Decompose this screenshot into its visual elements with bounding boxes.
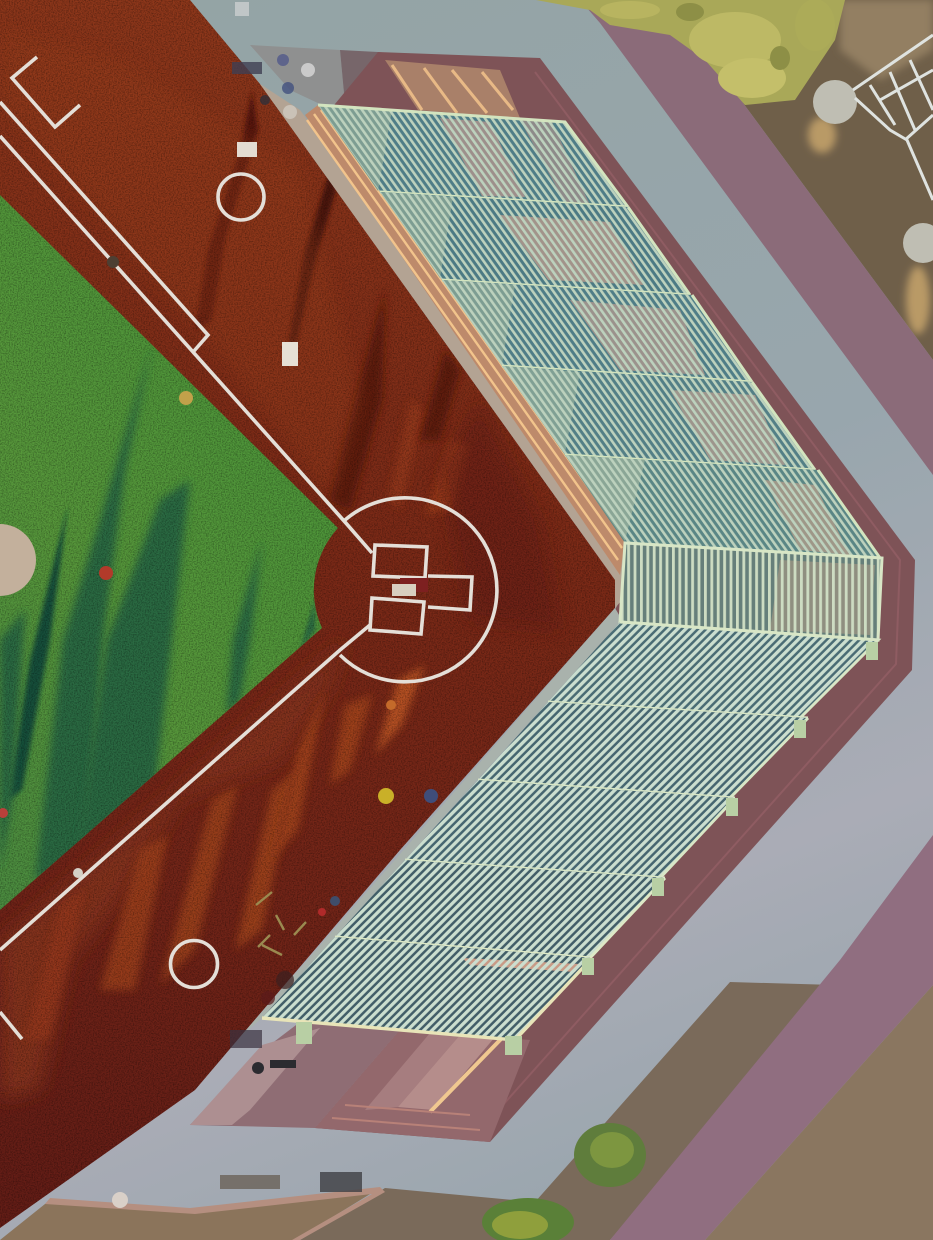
pergola panel 7 [478,702,808,798]
dirt: lower patch [300,982,835,1240]
people and gear [0,2,438,1208]
pergola panel 2 [380,192,690,295]
clay infield [0,0,615,1228]
orange stair band [305,105,627,575]
ramp lower left [190,1022,400,1128]
tower base circles [813,80,933,263]
top left marking [12,57,80,127]
on-deck circle: upper [218,174,264,220]
field grain texture [0,0,615,1228]
plaza slab top [340,50,418,110]
grass shadows [0,345,315,880]
pergola panel 5 [565,455,880,558]
bottom steps [315,1030,530,1142]
pink walkway: upper [580,0,933,475]
dirt: sunlit top corner [840,0,933,80]
third foul line [0,625,370,950]
dirt: bottom left strip [0,1188,380,1240]
top steps [385,60,520,118]
dirt: top right [670,0,933,360]
pergola panel 8 [405,780,735,878]
light tower [853,35,933,200]
clay light and shadow streaks [0,30,560,1100]
home plate circle [340,498,497,682]
pergola panel 10 [262,937,592,1040]
first foul line with coach lane [0,102,372,553]
pitcher's mound [0,524,36,596]
pergola panel 9 [335,860,665,958]
batter box: top [373,545,427,578]
pergola panel 1 [318,105,628,207]
ramp pale side [190,1028,320,1125]
concrete strip along lower pergola [240,608,622,1037]
pergola panel 4 [502,366,815,470]
catcher's box [428,576,472,610]
tree: small lower [574,1123,646,1187]
brick seating border [315,52,915,1142]
pergola panel 6 [548,622,878,718]
concrete apron top [250,45,345,104]
pergola panel 3 [442,280,752,382]
tree: top [536,0,845,105]
curb bottom [45,1187,385,1240]
pergola column feet [296,642,878,1055]
tree: bottom [482,1198,574,1240]
pergola panel middle [620,543,882,640]
batter box: bottom [370,598,424,634]
corner fragment [0,1012,22,1039]
dirt: bottom right [705,985,933,1240]
grass outfield [0,195,338,910]
dirt: sun spots under tower [808,117,930,334]
base lines and markings [0,57,497,1039]
concrete strip along infield [260,84,625,608]
on-deck circle: lower [170,940,218,988]
pink walkway: lower [610,835,933,1240]
brick highlight line [485,72,900,1125]
